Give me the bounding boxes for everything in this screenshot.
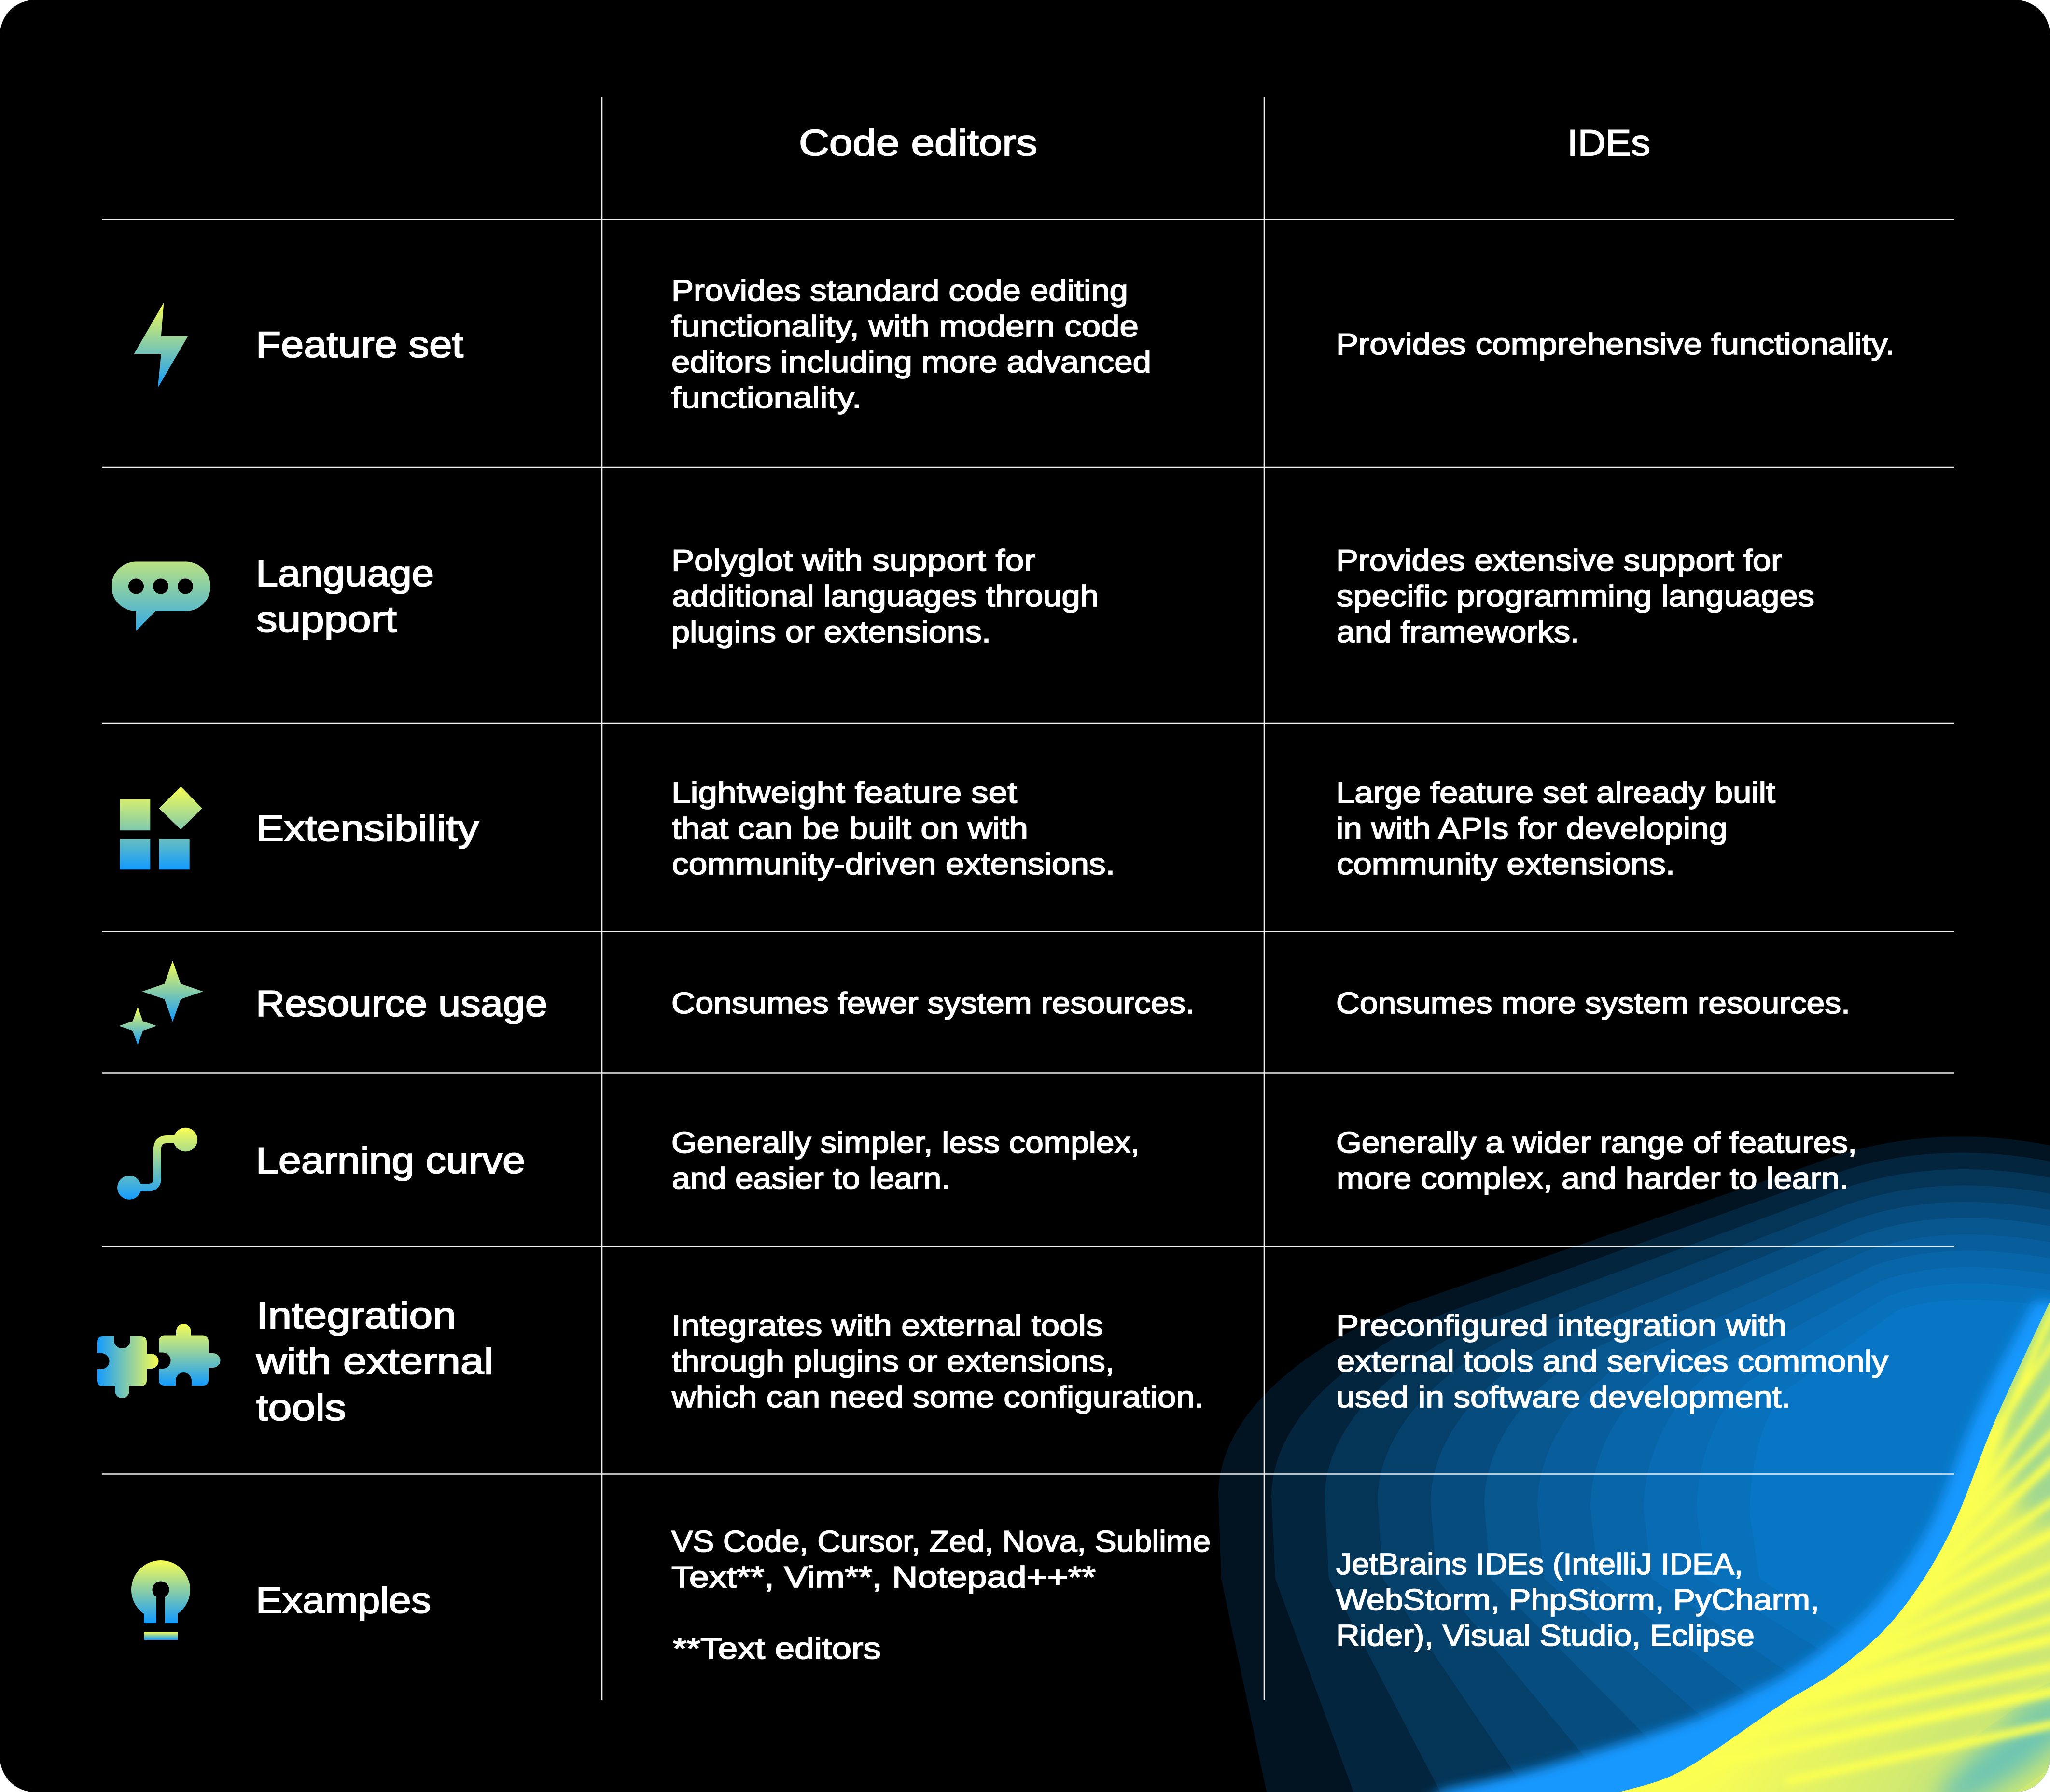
cell: Extensibility, IDEs: in with APIs for developing xyxy=(1336,812,1728,845)
icon: sparkles xyxy=(119,961,203,1045)
row label: Integration with external tools: with external xyxy=(256,1341,493,1382)
row label: Resource usage: Resource usage xyxy=(256,983,547,1024)
nested blue contour layers xyxy=(1218,1136,2050,1792)
cell: Examples, IDEs: JetBrains IDEs (IntelliJ IDEA, xyxy=(1336,1548,1743,1581)
cell: Examples, code editors: Text**, Vim**, Notepad++** xyxy=(671,1561,1096,1594)
icon: light bulb xyxy=(131,1560,190,1640)
icon: puzzle pieces xyxy=(97,1324,220,1398)
icon: learning curve path xyxy=(117,1128,197,1200)
cell: Extensibility, code editors: that can be built on with xyxy=(672,812,1028,845)
icon: lightning bolt xyxy=(134,302,188,388)
cell: Extensibility, code editors xyxy=(671,776,1115,881)
cell: Integration, code editors: through plugins or extensions, xyxy=(672,1345,1115,1378)
row label: Feature set: Feature set xyxy=(256,324,463,365)
cell: Examples, IDEs: WebStorm, PhpStorm, PyCharm, xyxy=(1336,1583,1819,1617)
cell: Learning curve, code editors xyxy=(671,1126,1140,1195)
cell: Language support, code editors: additional languages through xyxy=(672,580,1099,613)
row label: Learning curve: Learning curve xyxy=(256,1140,525,1181)
cell: Integration, code editors: which can need some configuration. xyxy=(671,1381,1204,1414)
row label: Language support: Language xyxy=(256,553,434,594)
row label: Examples: Examples xyxy=(256,1580,431,1621)
cell: Learning curve, IDEs: Generally a wider range of features, xyxy=(1336,1126,1857,1160)
cell: Integration, IDEs: used in software development. xyxy=(1336,1381,1791,1414)
cell: Integration, IDEs xyxy=(1336,1309,1888,1414)
cell: Feature set, code editors: editors including more advanced xyxy=(671,346,1151,379)
cell: Examples, code editors: VS Code, Cursor, Zed, Nova, Sublime xyxy=(671,1525,1211,1558)
column heading: Code editors: Code editors xyxy=(799,123,1037,164)
cell: Extensibility, IDEs: community extensions. xyxy=(1337,848,1675,881)
icon: blocks and diamond xyxy=(120,786,202,869)
cell: Integration, code editors xyxy=(671,1309,1204,1414)
decorative artwork: blue contours and yellow rays xyxy=(1218,1136,2050,1792)
column heading: IDEs: IDEs xyxy=(1567,123,1650,164)
cell: Learning curve, IDEs: more complex, and harder to learn. xyxy=(1337,1162,1849,1195)
cell: Examples, IDEs: Rider), Visual Studio, Eclipse xyxy=(1336,1619,1755,1652)
cell: Language support, code editors: Polyglot with support for xyxy=(671,544,1035,577)
icon: speech bubble xyxy=(112,562,210,631)
cell: Learning curve, code editors: Generally simpler, less complex, xyxy=(671,1126,1140,1160)
cell: Feature set, code editors: Provides standard code editing xyxy=(671,274,1128,308)
cell: Feature set, code editors: functionality, with modern code xyxy=(671,310,1139,343)
row label: Integration with external tools xyxy=(256,1295,493,1428)
cell: Feature set, code editors: functionality. xyxy=(671,381,862,415)
bright blue band along the wave edge xyxy=(1424,1301,2050,1792)
row label: Language support xyxy=(256,553,434,640)
cell: Examples, IDEs xyxy=(1336,1548,1819,1652)
cell: Extensibility, code editors: Lightweight feature set xyxy=(671,776,1017,810)
row label: Integration with external tools: Integration xyxy=(256,1295,456,1336)
cell: Feature set, code editors xyxy=(671,274,1151,415)
row label: Language support: support xyxy=(256,599,397,640)
cell: Integration, IDEs: external tools and services commonly xyxy=(1337,1345,1888,1378)
cell: Language support, code editors xyxy=(671,544,1099,649)
yellow wave with rays xyxy=(1619,1303,2050,1792)
cell: Examples, code editors xyxy=(671,1525,1211,1666)
row label: Integration with external tools: tools xyxy=(256,1387,346,1428)
cell: Learning curve, IDEs xyxy=(1336,1126,1857,1195)
cell: Extensibility, code editors: community-driven extensions. xyxy=(672,848,1115,881)
cell: Integration, code editors: Integrates with external tools xyxy=(671,1309,1103,1343)
cell: Examples, code editors: **Text editors xyxy=(673,1632,881,1666)
cell: Extensibility, IDEs xyxy=(1336,776,1775,881)
cell: Language support, IDEs: and frameworks. xyxy=(1337,616,1579,649)
row label: Extensibility: Extensibility xyxy=(256,808,479,849)
cell: Feature set, IDEs: Provides comprehensive functionality. xyxy=(1336,328,1895,361)
cell: Learning curve, code editors: and easier to learn. xyxy=(672,1162,950,1195)
cell: Language support, IDEs: specific programming languages xyxy=(1337,580,1814,613)
cell: Resource usage, code editors: Consumes fewer system resources. xyxy=(671,987,1195,1020)
cell: Integration, IDEs: Preconfigured integration with xyxy=(1336,1309,1786,1343)
cell: Language support, IDEs: Provides extensive support for xyxy=(1336,544,1782,577)
cell: Resource usage, IDEs: Consumes more system resources. xyxy=(1336,987,1850,1020)
cell: Language support, IDEs xyxy=(1336,544,1814,649)
cell: Language support, code editors: plugins or extensions. xyxy=(671,616,991,649)
cell: Extensibility, IDEs: Large feature set already built xyxy=(1336,776,1775,810)
